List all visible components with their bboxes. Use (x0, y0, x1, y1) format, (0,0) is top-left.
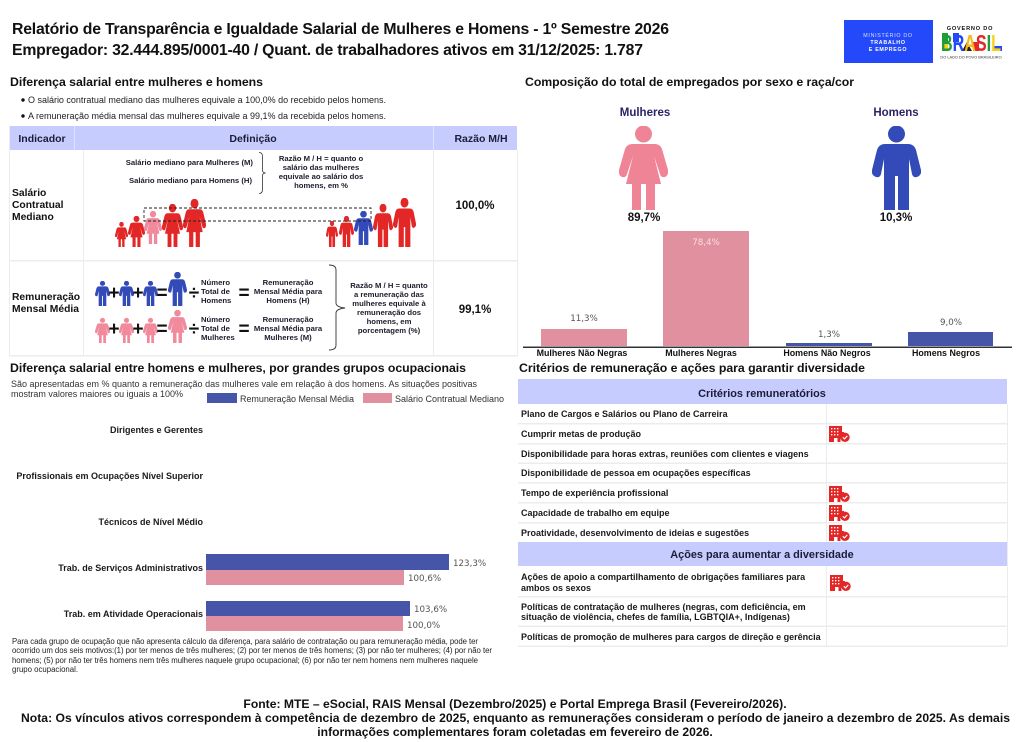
bar chart: composição por sexo e raça: Mulheres Negras (665, 348, 737, 358)
categoria: atividade operacional: 103,6% (414, 605, 447, 615)
fórmula: homens (95, 272, 323, 306)
figura: homens (872, 107, 921, 224)
table header: Definição (229, 133, 277, 145)
table header: Indicador (18, 133, 66, 145)
critério: proatividade (521, 525, 850, 541)
ação: políticas de contratação (521, 602, 806, 622)
definição: salário mediano: Razão M / H = quanto o (279, 154, 363, 163)
fórmula: mulheres: = (238, 319, 250, 340)
fórmula: homens: ÷ (189, 283, 199, 304)
ação: compartilhamento familiar: ambos os sexos (521, 583, 591, 593)
chave e definição da razão: a remuneração das (354, 290, 424, 299)
logo: Ministério do Trabalho e Emprego (844, 20, 933, 63)
figura: mulheres (619, 107, 670, 224)
subtítulo do gráfico (11, 379, 478, 399)
fórmula: mulheres: Número (201, 315, 230, 324)
bullets: resumo salarial: O salário contratual mediano das mulheres equivale a 100,0% do recebido pelos homens. (28, 95, 386, 105)
logo: Governo do Brasil: GOVERNO DO (947, 26, 993, 32)
logo: Governo do Brasil: BRASIL (941, 30, 1001, 56)
ação: políticas de contratação: situação de violência, chefes de família, LGBTQIA+, Indígenas) (521, 612, 790, 622)
heading: grupos ocupacionais: Diferença salarial entre homens e mulheres, por grandes grupos ocupacionais (10, 361, 466, 375)
heading: diferença salarial: Diferença salarial entre mulheres e homens (10, 75, 263, 89)
header: ações para diversidade (518, 542, 1007, 566)
critério: horas extras: Disponibilidade para horas extras, reuniões com clientes e viagens (521, 449, 809, 459)
logo: Ministério do Trabalho e Emprego: MINISTÉRIO DO (863, 32, 913, 39)
critério: ocupações específicas: Disponibilidade de pessoa em ocupações específicas (521, 468, 751, 478)
legenda: Salário Contratual Mediano (395, 394, 504, 404)
panel: tabela de indicadores (9, 126, 518, 356)
categoria: técnicos: Técnicos de Nível Médio (98, 517, 203, 527)
heading: critérios: Critérios de remuneração e ações para garantir diversidade (519, 361, 865, 375)
subtítulo do gráfico: mostram valores maiores ou iguais a 100% (11, 389, 183, 399)
definição: salário mediano: Salário mediano para Homens (H) (129, 176, 252, 185)
title: Relatório de Transparência e Igualdade Salarial de Mulheres e Homens - 1º Semestre 2026 (12, 21, 669, 38)
categoria: serviços administrativos: 100,6% (408, 574, 441, 584)
bar chart: composição por sexo e raça: 1,3% (818, 330, 840, 340)
icons: grupo de homens (326, 198, 416, 247)
definição: salário mediano: equivale ao salário dos (279, 172, 363, 181)
rodapé: fonte e nota (21, 697, 1010, 739)
fórmula: mulheres (95, 310, 323, 343)
row label: remuneração mensal média: Mensal Média (12, 304, 79, 315)
bar chart: composição por sexo e raça: Homens Negros (912, 348, 980, 358)
value: razão salário contratual: 100,0% (455, 200, 495, 212)
header: critérios remuneratórios (518, 379, 1007, 404)
logo: Governo do Brasil: DO LADO DO POVO BRASILEIRO (940, 54, 1002, 60)
fórmula: homens: = (238, 283, 250, 304)
nota do gráfico (12, 637, 492, 674)
nota do gráfico: Para cada grupo de ocupação que não apresenta cálculo da diferença, para salário de contratação ou para remuneração média, pode ter (12, 637, 478, 646)
fórmula: mulheres: Mulheres (M) (264, 333, 312, 342)
critério: proatividade: Proatividade, desenvolvimento de ideias e sugestões (521, 528, 749, 538)
legenda (207, 393, 504, 404)
row label: salário contratual mediano: Salário (12, 188, 46, 199)
categoria: profissionais: Profissionais em Ocupações Nível Superior (16, 471, 203, 481)
fórmula: mulheres: ÷ (189, 319, 199, 340)
fórmula: mulheres: + (108, 319, 120, 340)
table header: Razão M/H (454, 133, 508, 145)
bar chart: composição por sexo e raça: Homens Não Negros (783, 348, 871, 358)
table header (10, 126, 517, 150)
figura: mulheres: 89,7% (628, 212, 660, 224)
figura: mulheres: Mulheres (620, 107, 670, 119)
critério: plano de cargos: Plano de Cargos e Salários ou Plano de Carreira (521, 409, 729, 419)
fórmula: mulheres: Mulheres (201, 333, 235, 342)
bar chart: composição por sexo e raça: 78,4% (692, 238, 720, 248)
fórmula: homens: Mensal Média para (254, 287, 323, 296)
chave e definição da razão: mulheres equivale à (352, 299, 426, 308)
ação: políticas de promoção: Políticas de promoção de mulheres para cargos de direção e gerência (521, 632, 822, 642)
bar chart: composição por sexo e raça: 11,3% (570, 314, 598, 324)
fórmula: mulheres: = (156, 319, 168, 340)
title: Empregador: 32.444.895/0001-40 / Quant. de trabalhadores ativos em 31/12/2025: 1.787 (12, 42, 643, 59)
bullets: resumo salarial (21, 95, 386, 121)
critério: metas de produção (521, 426, 850, 442)
categoria: dirigentes: Dirigentes e Gerentes (110, 425, 203, 435)
fórmula: mulheres: Total de (201, 324, 231, 333)
critério: tempo de experiência: Tempo de experiência profissional (521, 488, 668, 498)
bar chart: grupos ocupacionais (16, 425, 486, 631)
categoria: serviços administrativos: Trab. de Serviços Administrativos (58, 563, 203, 573)
ação: compartilhamento familiar: Ações de apoio a compartilhamento de obrigações familiares para (521, 572, 806, 582)
nota do gráfico: grupo ocupacional. (12, 665, 78, 674)
chave e definição da razão: remuneração dos (357, 308, 421, 317)
critério: metas de produção: Cumprir metas de produção (521, 429, 642, 439)
definição: salário mediano (126, 152, 363, 194)
fórmula: homens: Homens (H) (266, 296, 310, 305)
fórmula: homens: Número (201, 278, 230, 287)
bar chart: composição por sexo e raça: Mulheres Não Negras (537, 348, 627, 358)
figura: homens: Homens (873, 107, 919, 119)
fórmula: mulheres: + (132, 319, 144, 340)
row label: remuneração mensal média (12, 292, 80, 315)
row label: salário contratual mediano: Mediano (12, 212, 54, 223)
header: ações para diversidade: Ações para aumentar a diversidade (670, 549, 854, 561)
categoria: serviços administrativos (58, 554, 486, 585)
nota do gráfico: homens; (5) por não ter três homens nem três mulheres naquele grupo ocupacional; (6) por não ter nem homens nem mulheres naquele (12, 656, 478, 665)
ação: políticas de contratação: Políticas de contratação de mulheres (negras, com deficiência, em (521, 602, 806, 612)
logo: Ministério do Trabalho e Emprego: E EMPREGO (869, 47, 907, 53)
rodapé: fonte e nota: Nota: Os vínculos ativos correspondem à competência de dezembro de 2025, enquanto as remunerações consideram o período de janeiro a dezembro de 2025. As demais (21, 711, 1010, 725)
critério: tempo de experiência (521, 486, 850, 502)
chave e definição da razão: porcentagem (%) (358, 326, 421, 335)
legenda: Remuneração Mensal Média (240, 394, 354, 404)
header: critérios remuneratórios: Critérios remuneratórios (698, 388, 826, 400)
fórmula: homens: + (108, 283, 120, 304)
chave e definição da razão: homens, em (367, 317, 412, 326)
row label: salário contratual mediano (12, 188, 64, 223)
panel: critérios remuneratórios e ações (518, 379, 1008, 647)
rodapé: fonte e nota: informações complementares foram coletadas em fevereiro de 2026. (317, 725, 713, 739)
bar chart: composição por sexo e raça: 9,0% (940, 318, 962, 328)
nota do gráfico: ocorrido um dos seis motivos:(1) por ter menos de três mulheres; (2) por ter menos de três homens; (3) por não ter mulheres; (4) por não ter (12, 646, 492, 655)
definição: salário mediano: Salário mediano para Mulheres (M) (126, 158, 253, 167)
ação: compartilhamento familiar (521, 572, 851, 593)
heading: composição: Composição do total de empregados por sexo e raça/cor (525, 75, 854, 89)
icons: grupo de mulheres (115, 199, 206, 247)
row label: remuneração mensal média: Remuneração (12, 292, 80, 303)
fórmula: mulheres: Mensal Média para (254, 324, 323, 333)
critério: trabalho em equipe: Capacidade de trabalho em equipe (521, 508, 670, 518)
chave e definição da razão: Razão M / H = quanto (350, 281, 428, 290)
row label: salário contratual mediano: Contratual (12, 200, 64, 211)
fórmula: homens: + (132, 283, 144, 304)
definição: salário mediano: salário das mulheres (283, 163, 359, 172)
categoria: atividade operacional: 100,0% (407, 621, 440, 631)
fórmula: mulheres: Remuneração (263, 315, 314, 324)
logo: Ministério do Trabalho e Emprego: TRABALHO (870, 40, 906, 46)
chave e definição da razão (329, 265, 428, 350)
fórmula: homens: = (156, 283, 168, 304)
bullets: resumo salarial: A remuneração média mensal das mulheres equivale a 99,1% da recebida pelos homens. (28, 111, 386, 121)
categoria: atividade operacional: Trab. em Atividade Operacionais (64, 609, 203, 619)
categoria: serviços administrativos: 123,3% (453, 559, 486, 569)
categoria: atividade operacional (64, 601, 447, 631)
dashed median box (144, 208, 371, 221)
subtítulo do gráfico: São apresentadas em % quanto a remuneração das mulheres vale em relação à dos homens. As situações positivas (11, 379, 478, 389)
fórmula: homens: Homens (201, 296, 231, 305)
value: razão remuneração: 99,1% (459, 304, 491, 316)
figura: homens: 10,3% (880, 212, 912, 224)
bar chart: composição por sexo e raça (523, 231, 1012, 358)
definição: salário mediano: homens, em % (294, 181, 348, 190)
fórmula: homens: Total de (201, 287, 231, 296)
fórmula: homens: Remuneração (263, 278, 314, 287)
title (12, 21, 669, 59)
critério: trabalho em equipe (521, 505, 850, 521)
rodapé: fonte e nota: Fonte: MTE – eSocial, RAIS Mensal (Dezembro/2025) e Portal Emprega Brasil (Fevereiro/2026). (243, 697, 787, 711)
